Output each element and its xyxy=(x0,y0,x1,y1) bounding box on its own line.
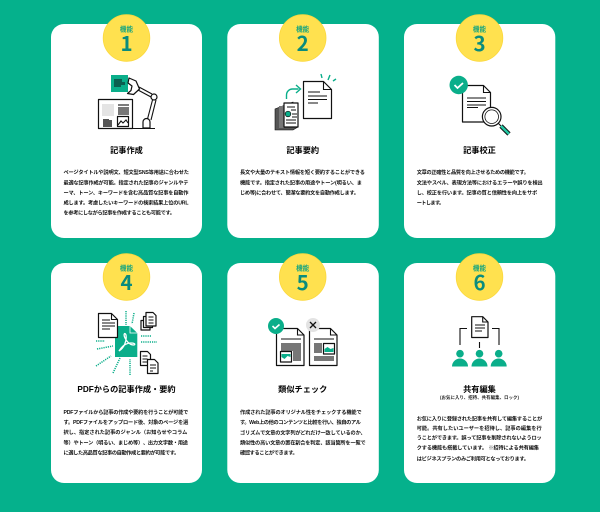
icon: robot arm writing an article xyxy=(98,75,157,128)
text block: 類似チェック description: ゴリズムで文章の文字列がどれだけ一致しているのか、 xyxy=(240,428,366,436)
badge: 機能6 xyxy=(456,254,503,300)
icon: document check with magnifier xyxy=(450,76,509,134)
panel: 記事校正 xyxy=(404,15,555,238)
text block: 記事要約 description: じめ等)に合わせて、簡潔な要約文を自動作成します。 xyxy=(240,188,359,196)
panel: PDFからの記事作成・要約 xyxy=(51,254,202,483)
text block: PDF description xyxy=(64,408,189,456)
badge: 機能1: 1 xyxy=(120,27,133,57)
badge: 機能5: 機能 xyxy=(296,264,310,272)
panel: 記事要約 xyxy=(227,15,379,238)
badge: 機能1 xyxy=(103,15,150,61)
text block: 共有編集 description xyxy=(417,414,543,462)
subheading: 共有編集 features: (お気に入り、招待、共有編集、ロック) xyxy=(440,394,520,401)
text block: 共有編集 description: うことができます。誤って記事を削除されないようロッ xyxy=(417,434,542,442)
text block: 類似チェック description: 確認することができます。 xyxy=(240,448,298,456)
text block: 記事作成 description: 成します。考慮したいキーワードの検索結果上位のURL xyxy=(64,198,189,206)
badge: 機能6: 機能 xyxy=(473,264,486,272)
text block: 類似チェック description: 類似性の高い文章の置在割合を判定、該当箇所を一覧で xyxy=(240,438,366,446)
icon: summarising documents xyxy=(275,74,336,130)
badge: 機能6: 6 xyxy=(473,266,486,296)
text block: 記事校正 description xyxy=(417,168,543,206)
badge: 機能3 xyxy=(456,15,503,61)
badge: 機能2: 機能 xyxy=(296,24,310,34)
text block: 記事作成 description: を参考にしながら記事を作成することも可能です。 xyxy=(64,209,175,217)
text block: PDF description: に適した高品質な記事の自動作成と要約が可能です。 xyxy=(64,448,179,456)
badge: 機能4: 機能 xyxy=(120,264,133,272)
heading: 記事校正: 記事校正 xyxy=(463,145,496,155)
badge: 機能3: 3 xyxy=(473,27,486,57)
panel: 記事作成 xyxy=(51,15,202,238)
text block: 記事要約 description: 機能です。指定された記事の用途やトーン(明るい、ま xyxy=(240,178,362,186)
badge: 機能4: 4 xyxy=(120,266,133,296)
icon: shared editing team xyxy=(452,317,507,366)
badge: 機能4 xyxy=(103,254,150,300)
badge: 機能5: 5 xyxy=(297,266,309,296)
heading: 類似チェック: 類似チェック xyxy=(278,384,327,394)
badge: 機能2 xyxy=(279,15,326,61)
text block: 記事要約 description: 長文や大量のテキスト情報を短く要約することができる xyxy=(240,168,365,176)
badge: 機能3: 機能 xyxy=(473,24,486,34)
panel: 共有編集 xyxy=(404,254,555,483)
text block: 記事作成 description: ページタイトルや説明文、短文型SNS等用途に合わせた xyxy=(64,168,189,176)
heading: 共有編集: 共有編集 xyxy=(463,384,496,394)
text block: 記事校正 description: し、校正を行います。記事の質と信頼性を向上をサポ xyxy=(417,188,537,196)
text block: 記事作成 description: 最適な記事作成が可能。指定された記事のジャンルやテ xyxy=(64,178,188,186)
heading: 記事作成: 記事作成 xyxy=(110,145,143,155)
heading: PDFからの記事作成・要約: PDFからの記事作成・要約 xyxy=(77,384,176,394)
text block: 記事校正 description: 文法やスペル、表現方法等におけるエラーや誤りを検出 xyxy=(417,178,543,186)
text block: 記事校正 description: 文章の正確性と品質を向上させるための機能です。 xyxy=(417,168,529,176)
badge: 機能1: 機能 xyxy=(120,24,133,34)
text block: 共有編集 description: お気に入りに登録された記事を共有して編集することが xyxy=(417,414,543,422)
text block: 記事作成 description xyxy=(64,168,189,217)
text block: 記事作成 description: ーマ、トーン、キーワードを含む高品質な記事を自動作 xyxy=(64,188,189,196)
text block: 類似チェック description xyxy=(240,408,366,456)
text block: PDF description: 等）やトーン（明るい、まじめ等）、出力文字数・用途 xyxy=(64,438,189,446)
text block: PDF description: す。PDFファイルをアップロード後、対象のページを選 xyxy=(64,418,189,426)
text block: 共有編集 description: 可能。共有したいユーザーを招待し、記事の編集を行 xyxy=(417,424,542,432)
text block: PDF description: PDFファイルから記事の作成や要約を行うことが可能で xyxy=(64,408,188,416)
text block: 共有編集 description: はビジネスプランのみご利用可となっております。 xyxy=(417,454,529,462)
heading: 記事要約: 記事要約 xyxy=(286,145,319,155)
text block: 記事校正 description: ートします。 xyxy=(417,200,444,206)
badge: 機能5 xyxy=(279,254,326,300)
icon: comparing two documents xyxy=(268,318,337,366)
badge: 機能2: 2 xyxy=(297,27,309,57)
panel: 類似チェック xyxy=(227,254,379,483)
text block: PDF description: 択し、指定された記事のジャンル（お知らせやコラム xyxy=(64,428,187,436)
text block: 類似チェック description: す。Web上の他のコンテンツと比較を行い、独自のアル xyxy=(240,418,362,426)
text block: 共有編集 description: クする機能も搭載しています。 ※招待による共有編集 xyxy=(417,444,540,452)
text block: 記事要約 description xyxy=(240,168,365,196)
icon: PDF with documents and rays xyxy=(96,311,158,375)
text block: 類似チェック description: 作成された記事のオリジナル性をチェックする機能で xyxy=(240,408,362,416)
